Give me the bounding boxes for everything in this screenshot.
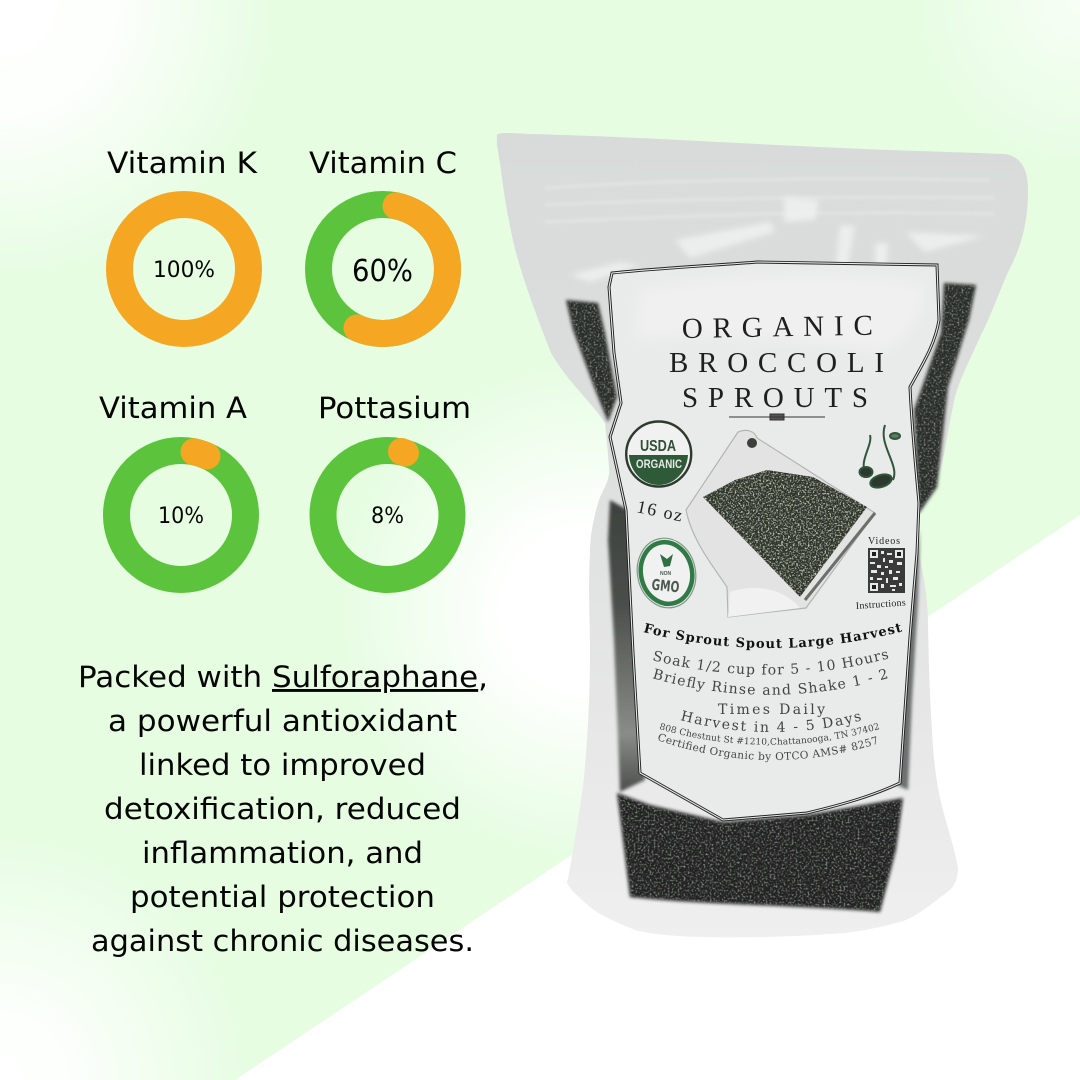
- seeds: bottom block: [617, 793, 903, 912]
- heading: Vitamin A: Vitamin A: [99, 391, 247, 425]
- bag body: [497, 133, 1028, 937]
- QR code: [868, 548, 905, 593]
- seeds: lower right strip: [897, 530, 920, 790]
- heading: Pottasium: Pottasium: [318, 391, 471, 425]
- text block: sulforaphane description: a powerful antioxidant: [108, 704, 457, 738]
- product: broccoli sprouts bag: [496, 133, 1028, 938]
- badge: USDA organic: ORGANIC: [636, 457, 682, 471]
- weight: 16 oz: 16 oz: [635, 496, 684, 525]
- label instructions text: Briefly Rinse and Shake 1 - 2: [652, 668, 888, 695]
- label card: [609, 262, 939, 820]
- badge: non GMO: [631, 533, 702, 613]
- value: 60%: 60%: [352, 254, 413, 289]
- badge: USDA organic: USDA: [640, 438, 676, 455]
- ring: green track: [323, 450, 452, 580]
- ring: green track: [318, 204, 448, 334]
- ring: orange arc 10%: [194, 452, 207, 456]
- label instructions text: Certified Organic by OTCO AMS# 8257: [658, 734, 876, 762]
- plastic reflections: [570, 197, 985, 292]
- label title: [669, 310, 884, 414]
- donut chart: Vitamin C 60%: [309, 146, 457, 334]
- text block: sulforaphane description: Packed with Sulforaphane ,: [78, 660, 488, 694]
- badge: non GMO: GMO: [651, 576, 680, 596]
- donut chart: Vitamin K 100%: [107, 146, 258, 334]
- text block: sulforaphane description: detoxification, reduced: [104, 792, 461, 826]
- label instructions text: For Sprout Spout Large Harvest: [644, 622, 902, 650]
- ring: full orange: [120, 204, 248, 334]
- ring: orange arc 8%: [402, 452, 406, 453]
- value: 8%: 8%: [371, 504, 404, 529]
- seeds: lower left strip: [608, 500, 645, 792]
- text block: sulforaphane description: against chronic diseases.: [91, 924, 474, 958]
- label instructions text: Harvest in 4 - 5 Days: [680, 710, 861, 732]
- label instructions text: Soak 1/2 cup for 5 - 10 Hours: [653, 650, 888, 677]
- ring: orange arc 60%: [357, 206, 448, 333]
- caption: Instructions: Instructions: [855, 598, 906, 612]
- label instructions text: [644, 622, 902, 762]
- title ornament: [729, 414, 825, 420]
- seeds: left strip: [566, 300, 617, 422]
- badge: non GMO: NON: [660, 571, 672, 577]
- label instructions text: 808 Chestnut St #1210,Chattanooga, TN 37402: [660, 723, 880, 746]
- text block: sulforaphane description: potential protection: [130, 880, 435, 914]
- text block: sulforaphane description: inflammation, and: [142, 836, 423, 870]
- value: 10%: 10%: [158, 504, 204, 529]
- label title: ORGANIC: [682, 310, 873, 345]
- badge: USDA organic: [626, 422, 691, 486]
- value: 100%: 100%: [153, 258, 215, 283]
- ring: green track: [116, 450, 246, 580]
- donut chart: Vitamin A 10%: [99, 391, 247, 580]
- label instructions text: Times Daily: [718, 702, 825, 718]
- heading: Vitamin K: Vitamin K: [107, 146, 258, 180]
- seeds: right strip: [914, 283, 976, 513]
- icon: sprouts logo: [860, 425, 900, 490]
- caption: Videos: Videos: [868, 536, 900, 547]
- zip seal highlights: [545, 179, 995, 222]
- text block: sulforaphane description: [78, 660, 488, 958]
- label title: BROCCOLI: [669, 347, 884, 379]
- donut chart: Pottasium 8%: [318, 391, 471, 580]
- label title: SPROUTS: [682, 382, 868, 414]
- label top glare: [635, 275, 925, 352]
- text block: sulforaphane description: linked to improved: [139, 748, 426, 782]
- heading: Vitamin C: Vitamin C: [309, 146, 457, 180]
- jar with sprouts: [686, 430, 875, 617]
